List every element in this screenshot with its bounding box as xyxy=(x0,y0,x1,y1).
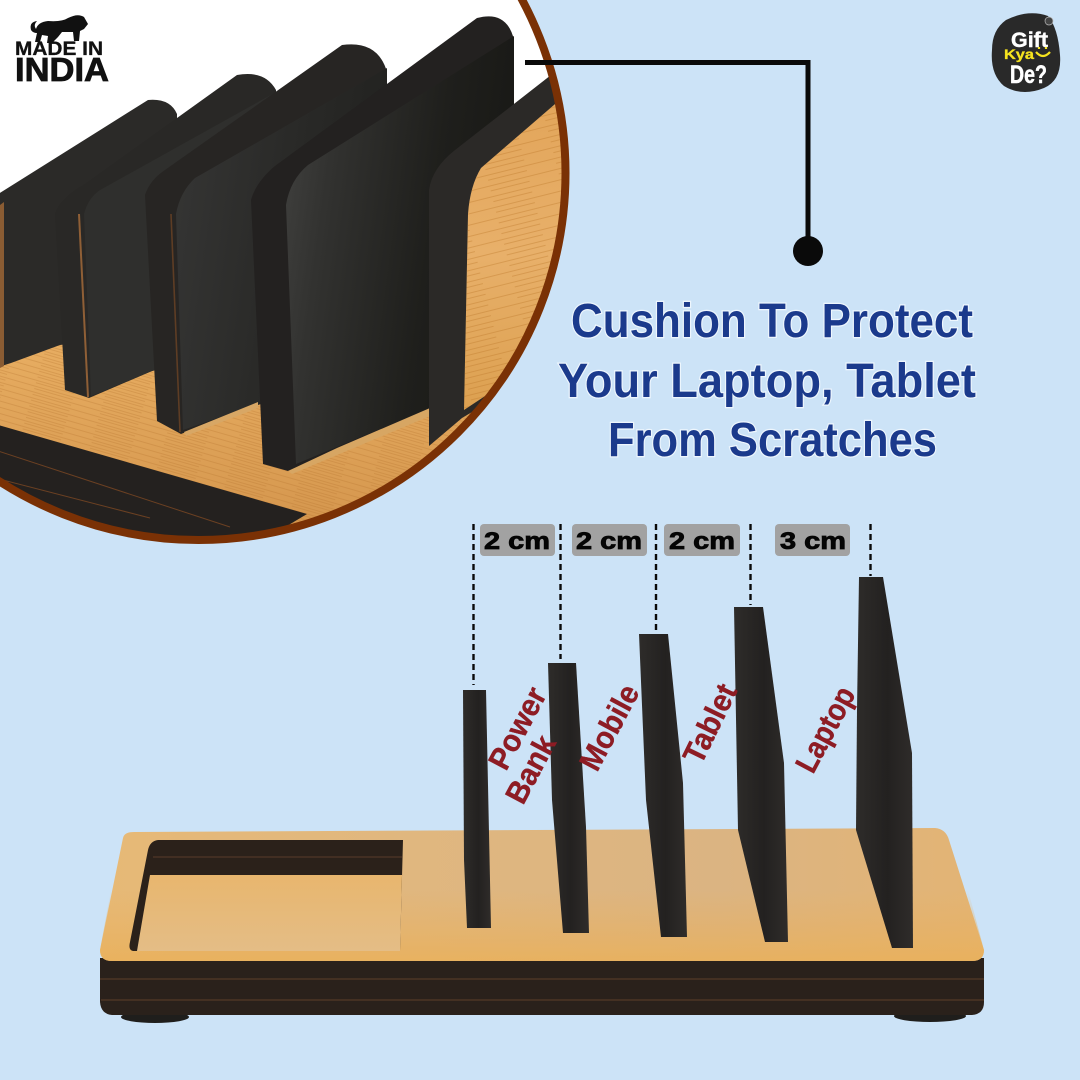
post: mobile xyxy=(548,663,589,933)
heading: Your Laptop, Tablet xyxy=(558,355,976,408)
post: power bank xyxy=(463,690,491,928)
rotated device labels: Bank xyxy=(498,729,563,809)
zoomed product circle xyxy=(0,0,566,560)
de text: De? xyxy=(1010,61,1047,89)
logo: made in india xyxy=(15,15,109,88)
dark front edge of the base xyxy=(0,426,307,536)
callout leader line xyxy=(525,62,823,266)
logo: gift kya de xyxy=(992,13,1060,92)
pill 3 cm: 3 cm xyxy=(780,528,846,555)
cushion panel 3 xyxy=(145,44,387,436)
wood top xyxy=(100,828,984,961)
heading xyxy=(558,295,976,467)
gift text: Gift xyxy=(1011,29,1048,52)
pill 2 cm xyxy=(572,524,647,556)
post: tablet large xyxy=(734,607,788,942)
smile xyxy=(1036,47,1050,56)
made in text: MADE IN xyxy=(15,38,103,60)
rotated device labels: Laptop xyxy=(788,681,862,778)
post: tablet xyxy=(639,634,687,937)
tray cutout xyxy=(129,840,403,951)
feet xyxy=(121,1011,189,1023)
divider posts xyxy=(463,577,913,948)
stand base xyxy=(100,828,984,1023)
rotated device labels: Tablet xyxy=(676,678,744,769)
pill 2 cm: 2 cm xyxy=(576,528,642,555)
logo blob xyxy=(992,13,1060,92)
rotated device labels xyxy=(481,678,862,809)
wood floor of the stand xyxy=(0,344,472,524)
heading: From Scratches xyxy=(608,414,937,467)
heading: Cushion To Protect xyxy=(571,295,973,348)
cushion panel 4 (front foam) xyxy=(251,16,514,474)
wood side panel 5 xyxy=(429,68,562,446)
post: laptop xyxy=(856,577,913,948)
pill 2 cm xyxy=(664,524,740,556)
india text: INDIA xyxy=(15,51,109,88)
circle border xyxy=(0,0,566,540)
pill 2 cm xyxy=(480,524,555,556)
dashed measurement lines xyxy=(474,524,870,685)
icon: lion xyxy=(31,15,88,43)
rotated device labels: Mobile xyxy=(572,679,646,776)
pill 3 cm xyxy=(775,524,850,556)
cushion panel 2 xyxy=(55,74,276,398)
pill 2 cm: 2 cm xyxy=(484,528,550,555)
size pills xyxy=(480,524,850,556)
rotated device labels: Power xyxy=(481,681,553,775)
cushion panel 1 xyxy=(0,100,177,368)
dark base edge xyxy=(100,958,984,1015)
pill 2 cm: 2 cm xyxy=(669,528,735,555)
registered mark xyxy=(1045,17,1053,25)
kya text: Kya xyxy=(1004,46,1034,62)
